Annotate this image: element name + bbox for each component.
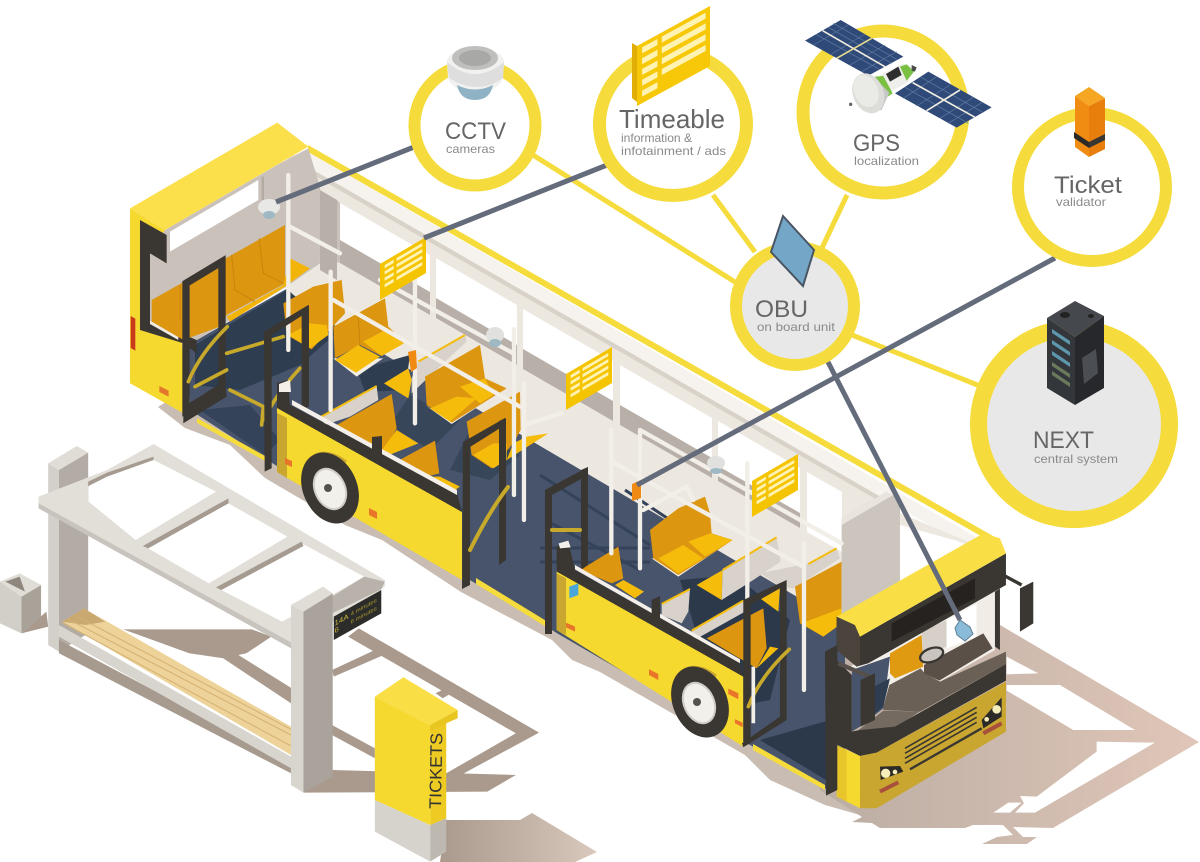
- connector: timetable to bus sign: [424, 165, 607, 238]
- partition J with seat: [697, 537, 781, 600]
- shelter ground shadow: [21, 473, 539, 793]
- seat pair F: [467, 392, 548, 468]
- rear door: [183, 262, 309, 472]
- label: information: information &: [621, 131, 692, 145]
- cab lower band: [837, 660, 1006, 756]
- roof edge strip: [308, 145, 1000, 547]
- icon: ticket validator: [1074, 87, 1105, 157]
- partition L with seat: [760, 548, 840, 612]
- bus near-side ground shadow: [158, 380, 900, 815]
- seats mid rear: [283, 280, 548, 493]
- ticket kiosk: [375, 677, 597, 862]
- circle: CCTV: [414, 46, 536, 186]
- seat pair N: [707, 608, 778, 668]
- seat E: [397, 441, 460, 493]
- label: localization: localization: [854, 154, 919, 168]
- headlights: [880, 697, 1002, 792]
- departure display: 14A: [335, 612, 349, 628]
- satellite dish: [846, 68, 890, 118]
- rear wheel: [290, 443, 370, 533]
- departure display: [334, 590, 381, 640]
- icon: server rack: [1047, 301, 1104, 405]
- seats mid front: [580, 497, 842, 668]
- upper solar panel: [805, 20, 903, 76]
- label: CCTV: CCTV: [445, 118, 506, 145]
- far front pillar: [995, 589, 1000, 650]
- rear bench: [152, 225, 310, 340]
- sign: timetable 2: [566, 347, 612, 410]
- seat H: [580, 547, 644, 598]
- floor: [188, 288, 845, 790]
- departure display: 6 minutes: [351, 605, 377, 626]
- label: on board unit: on board unit: [757, 320, 836, 334]
- bus: [130, 123, 1033, 808]
- circle: timetable: [600, 6, 746, 196]
- wooden bench: [59, 608, 291, 773]
- label: NEXT: NEXT: [1033, 427, 1094, 454]
- accessibility sign: [569, 583, 578, 598]
- circle: GPS: [803, 20, 992, 193]
- waste bin: [0, 573, 41, 633]
- grab poles and rails: [288, 175, 842, 697]
- handrails: [188, 327, 300, 425]
- on-board validators: [408, 350, 641, 501]
- bumper: [837, 682, 1006, 808]
- label: OBU: OBU: [755, 296, 808, 323]
- middle door: [462, 418, 588, 634]
- label: central system: central system: [1034, 452, 1118, 466]
- satellite body: [875, 63, 917, 97]
- connector: CCTV to OBU: [533, 155, 735, 282]
- front post: [291, 587, 333, 793]
- connector: CCTV to bus camera: [276, 147, 414, 202]
- near wall section one: [277, 380, 462, 580]
- connector: OBU to NEXT: [852, 335, 980, 386]
- steering wheel: [918, 645, 945, 665]
- kiosk shadow: [440, 813, 597, 862]
- front wheel: [660, 657, 740, 747]
- label: Timeable: Timeable: [619, 104, 725, 134]
- far wall: [287, 145, 1000, 660]
- seat pair B: [333, 298, 405, 377]
- departure display: 4 minutes: [351, 597, 377, 618]
- sign: timetable 3: [752, 454, 798, 517]
- bus stop shelter: [0, 444, 539, 793]
- rear post: [48, 446, 88, 652]
- label: cameras: cameras: [446, 142, 495, 156]
- icon: satellite: [805, 20, 992, 128]
- seat pair G: [650, 497, 733, 577]
- seat pair C: [425, 345, 507, 424]
- connector: ticket validator to bus: [637, 258, 1055, 485]
- circle: ticket validator: [1018, 87, 1166, 261]
- sign: timetable 1: [380, 237, 426, 300]
- circle: NEXT: [978, 301, 1170, 520]
- driver seat: [890, 635, 923, 678]
- connector: GPS to OBU: [822, 195, 847, 248]
- front door: [742, 580, 789, 747]
- icon: timetable board: [632, 6, 710, 106]
- door steps: [197, 418, 825, 790]
- connector: timetable to OBU: [713, 195, 755, 252]
- partition near door: [320, 386, 378, 425]
- front roof cap: [837, 533, 1006, 637]
- icon: CCTV camera: [447, 46, 504, 100]
- upper cab band: [837, 553, 1006, 667]
- kiosk label: TICKETS: [426, 733, 446, 809]
- shelter structure: [0, 444, 385, 793]
- near wall section two: [557, 541, 743, 747]
- label: validator: validator: [1056, 195, 1106, 209]
- windscreen view: [850, 587, 995, 732]
- dashboard: [857, 633, 1006, 732]
- rear body: [130, 123, 320, 413]
- bus front ground shadow: [800, 620, 1199, 844]
- rear roof cap: [130, 123, 308, 230]
- icon: dashboard unit: [955, 620, 973, 641]
- label: Ticket: Ticket: [1054, 172, 1122, 199]
- seat pair M: [795, 562, 842, 637]
- partition and seat under validator: [384, 335, 467, 398]
- tail light: [131, 316, 135, 351]
- mirrors: [825, 576, 1033, 796]
- label: infotainment: infotainment / ads: [621, 144, 726, 158]
- circle: OBU: [736, 216, 854, 365]
- bus front: [837, 587, 1006, 808]
- rear frame: [140, 220, 197, 353]
- grille: [905, 707, 977, 763]
- partition I: [662, 588, 690, 623]
- seat pair D: [337, 394, 418, 457]
- on-board cameras: [258, 199, 725, 474]
- departure display: 6: [335, 624, 339, 635]
- partition behind driver: [842, 492, 900, 617]
- icon: OBU tablet: [771, 216, 814, 286]
- connector: OBU to dashboard unit: [828, 362, 960, 620]
- label: GPS: GPS: [853, 130, 900, 157]
- partition K: [692, 600, 745, 641]
- roof frame: [39, 444, 385, 649]
- lower solar panel: [895, 72, 992, 128]
- seat pair A: [283, 280, 345, 349]
